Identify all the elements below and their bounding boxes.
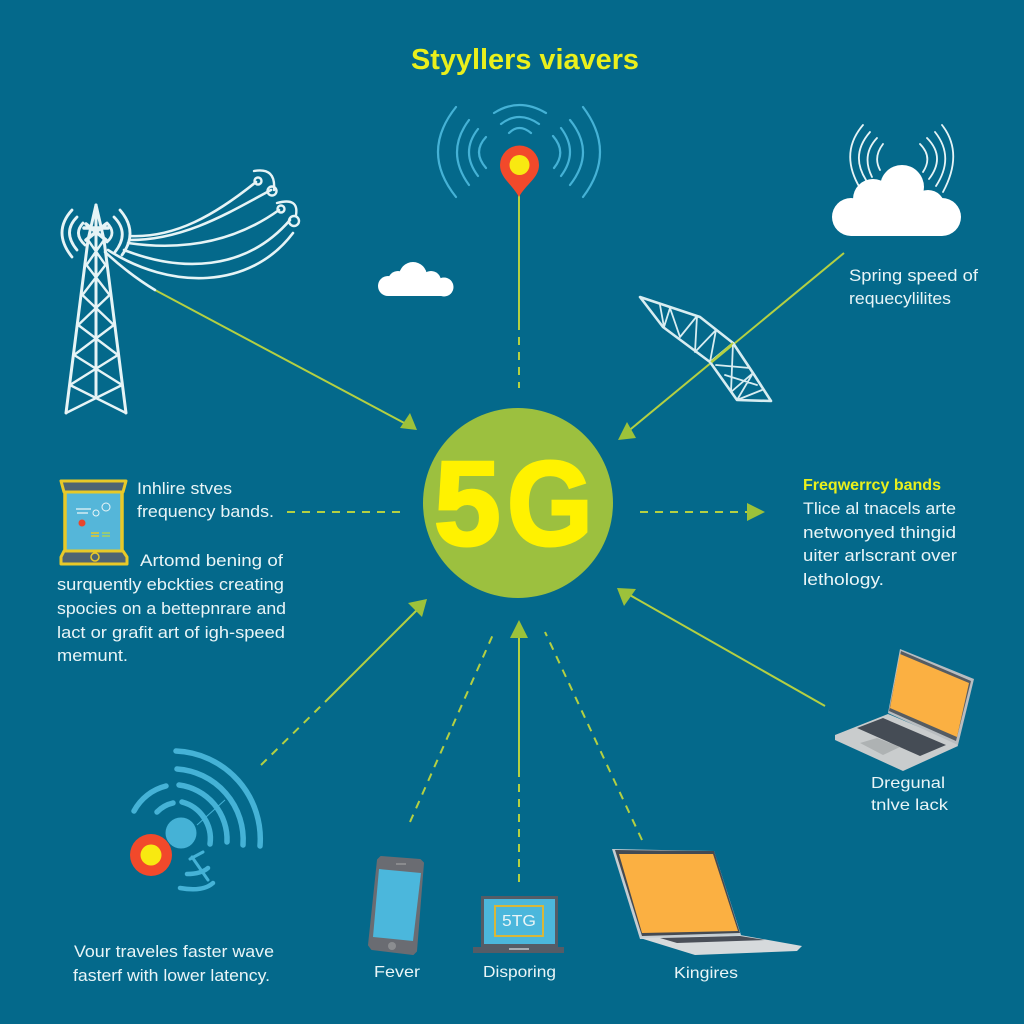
icon: small cloud: [378, 262, 454, 296]
title: Styyllers viavers: [411, 44, 639, 76]
text: right laptop label: tnlve lack: [871, 797, 949, 814]
text: right laptop label: Dregunal: [871, 775, 945, 792]
text: frequency bands: [803, 477, 957, 589]
text: spring speed: requecylilites: [849, 289, 951, 308]
label: bottom laptop: Kingires: [674, 965, 738, 982]
arrow: tower to 5G: [155, 290, 417, 430]
text: left description: spocies on a bettepnrare and: [57, 599, 286, 618]
arrow: 5G to frequency bands: [640, 503, 765, 521]
text: frequency bands: uiter arlscrant over: [803, 546, 957, 565]
text: frequency bands: lethology.: [803, 570, 884, 589]
text: spring speed: [849, 266, 978, 308]
text: frequency bands: Freqwerrcy bands: [803, 477, 941, 494]
icon: cloud with signal arcs: [832, 125, 961, 236]
arrow overlay through truss: [711, 343, 733, 362]
icon: location pin with signal arcs: [438, 105, 600, 197]
arrow: right laptop to 5G: [617, 588, 825, 706]
arrow: bottom laptop to 5G: [545, 632, 642, 840]
text: frequency bands: netwonyed thingid: [803, 523, 956, 542]
arrow: cloud to 5G: [618, 253, 844, 440]
text: left description: frequency bands.: [137, 502, 274, 521]
icon: monitor with 5TG: 5TG: [502, 913, 536, 930]
arrow: signal icon to 5G: [261, 599, 427, 765]
text: left description: [57, 479, 286, 665]
label: phone: Fever: [374, 964, 421, 981]
icon: truss arc: [640, 297, 771, 401]
text: left description: Artomd bening of: [140, 551, 283, 570]
icon: right laptop: [835, 649, 974, 771]
icon: signal waves with red dot: [130, 751, 260, 889]
icon: smartphone: [369, 857, 423, 954]
icon: device panel: [61, 481, 127, 564]
text: latency note: fasterf with lower latency.: [73, 966, 270, 985]
arrow: monitor to 5G: [510, 620, 528, 882]
arrow: left text to 5G: [287, 511, 402, 513]
arrow: phone to 5G: [410, 630, 495, 822]
icon: lattice tower with wires: [62, 170, 299, 413]
text: spring speed: Spring speed of: [849, 266, 978, 285]
text: left description: Inhlire stves: [137, 479, 232, 498]
icon: monitor with 5TG: [473, 896, 564, 953]
icon: bottom laptop: [612, 849, 802, 955]
text: left description: lact or grafit art of igh-speed: [57, 623, 285, 642]
text: frequency bands: Tlice al tnacels arte: [803, 499, 956, 518]
label: monitor: Disporing: [483, 964, 556, 981]
5G label: G: [507, 438, 593, 571]
text: left description: memunt.: [57, 646, 128, 665]
text: latency note: Vour traveles faster wave: [74, 942, 274, 961]
text: latency note: [73, 942, 274, 985]
icon: 5G hub circle: [423, 408, 613, 598]
5G label: 5: [434, 437, 501, 571]
5G label: [434, 437, 593, 571]
arrow: signal pin to 5G: [518, 195, 520, 388]
text: left description: surquently ebckties creating: [57, 575, 284, 594]
text: right laptop label: [871, 775, 949, 814]
